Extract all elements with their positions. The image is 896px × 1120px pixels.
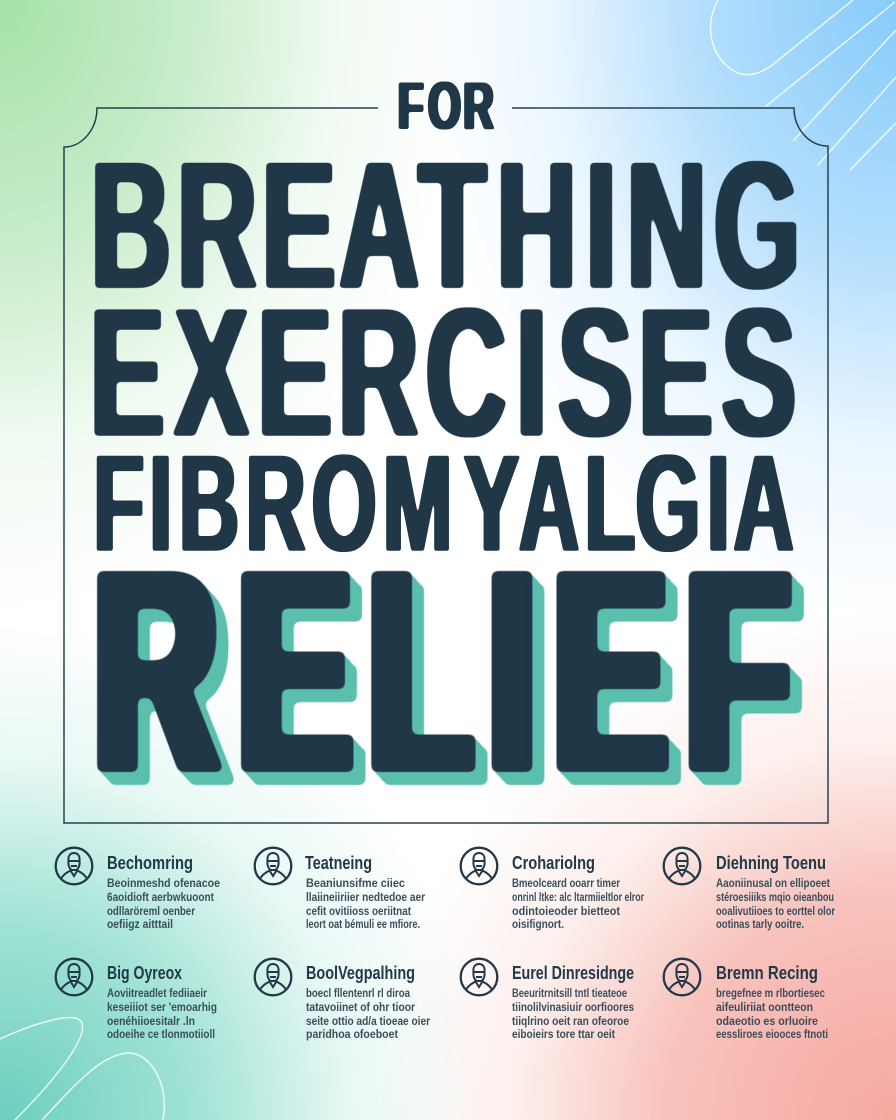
item description: stéroesiiiks mqio oieanbou [716,892,834,904]
item heading: Crohariolng [512,853,595,873]
item description [107,988,217,1041]
item description: tiiqlrino oeit ran ofeoroe [512,1016,629,1028]
item heading: Big Oyreox [107,963,182,983]
item description: keseiiiot ser 'emoarhig [107,1002,217,1014]
item heading: Eurel Dinresidnge [512,963,634,983]
item description: odoeihe ce tlonmotiioll [107,1029,215,1041]
item description: cefit ovitiioss oeriitnat [306,906,411,918]
item description: aifeuliriiat oontteon [716,1002,813,1014]
item description: odintoieoder bietteot [512,906,620,918]
title: FOR: FOR [398,68,494,143]
icon: person [461,959,497,995]
item description: bregefnee m rlbortiesec [716,988,825,1000]
icon: person [56,848,92,884]
item description: odaeotio es orluoire [716,1016,818,1028]
title frame [64,108,828,823]
item row 1 column 4 [664,848,835,931]
item heading: Bremn Recing [716,963,818,983]
item description: Aoviitreadlet fediiaeir [107,988,207,1000]
item description: Beoinmeshd ofenacoe [107,878,220,890]
item description: eessliroes eiooces ftnoti [716,1029,828,1041]
item row 2 column 2 [255,959,430,1041]
item description: Bmeolceard ooarr timer [512,878,620,890]
icon: person [664,959,700,995]
item description: tiinolilvinasiuir oorfioores [512,1002,634,1014]
item description: onrinl ltke: alc ltarmiieltlor elror [512,892,644,904]
item description: eiboieirs tore ttar oeit [512,1029,615,1041]
item description: tatavoiinet of ohr tioor [306,1002,415,1014]
item row 1 column 1 [56,848,220,931]
item description: paridhoa ofoeboet [306,1029,398,1041]
decorative curves: bottom left [0,1018,164,1120]
item description: Beeuritrnitsill tntl tieateoe [512,988,627,1000]
item description [716,878,835,931]
item description: ooalivutiioes to eorttel olor [716,906,835,918]
item heading: Teatneing [305,853,372,873]
item description: oefiigz aitttail [107,919,173,931]
item row 1 column 2 [255,848,425,931]
item description: boecl fllentenrl rl diroa [306,988,411,1000]
item description [512,878,644,931]
item description: odllaröreml oenber [107,906,195,918]
title: RELIEF with teal extruded shadow: RELIEF [94,513,790,829]
item heading: BoolVegpalhing [306,963,415,983]
icon: person [56,959,92,995]
item description: oenéhiioesitalr .ln [107,1016,195,1028]
icon: person [255,959,291,995]
icon: person [255,848,291,884]
item row 2 column 1 [56,959,217,1041]
item description: llaiineiiriier nedtedoe aer [306,892,425,904]
title: FIBROMYALGIA: FIBROMYALGIA [93,427,794,581]
item description [716,988,828,1041]
title: BREATHING: BREATHING [91,124,800,327]
item description [512,988,634,1041]
icon: person [461,848,497,884]
item description: Beaniunsifme ciiec [306,878,406,890]
item description [306,878,425,931]
item heading: Diehning Toenu [716,853,826,873]
decorative curves: top right [711,0,896,170]
item description: seite ottio ad/a tioeae oier [306,1016,430,1028]
item description: leort oat bémuli ee mfiore. [306,919,420,931]
icon: person [664,848,700,884]
item description: Aaoniinusal on ellipoeet [716,878,830,890]
item heading: Bechomring [107,853,193,873]
item description: ootinas tarly ooitre. [716,919,804,931]
title: EXERCISES: EXERCISES [90,270,796,476]
item row 1 column 3 [461,848,644,931]
item row 2 column 4 [664,959,828,1041]
item description: oisifignort. [512,919,564,931]
item description [107,878,220,931]
item row 2 column 3 [461,959,634,1041]
item description [306,988,430,1041]
item description: 6aoidioft aerbwkuoont [107,892,214,904]
